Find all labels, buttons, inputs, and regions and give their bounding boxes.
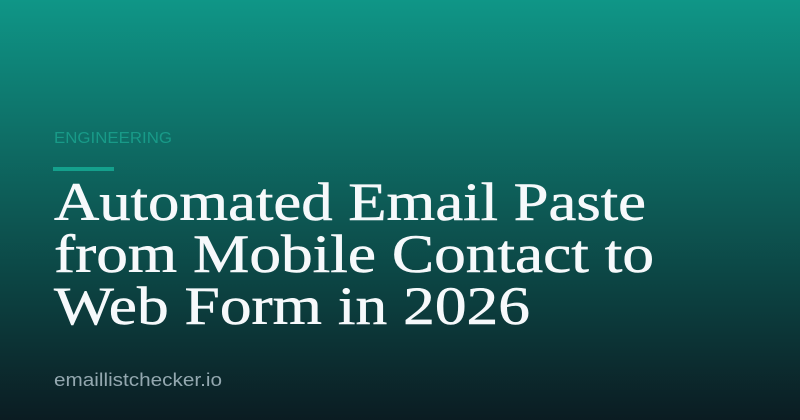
title: from Mobile Contact to xyxy=(54,224,654,284)
title xyxy=(54,172,654,336)
accent bar xyxy=(53,167,114,171)
title: Automated Email Paste xyxy=(54,172,646,232)
site name: emaillistchecker.io xyxy=(54,370,222,390)
category label: ENGINEERING xyxy=(54,130,172,147)
title: Web Form in 2026 xyxy=(54,276,530,336)
